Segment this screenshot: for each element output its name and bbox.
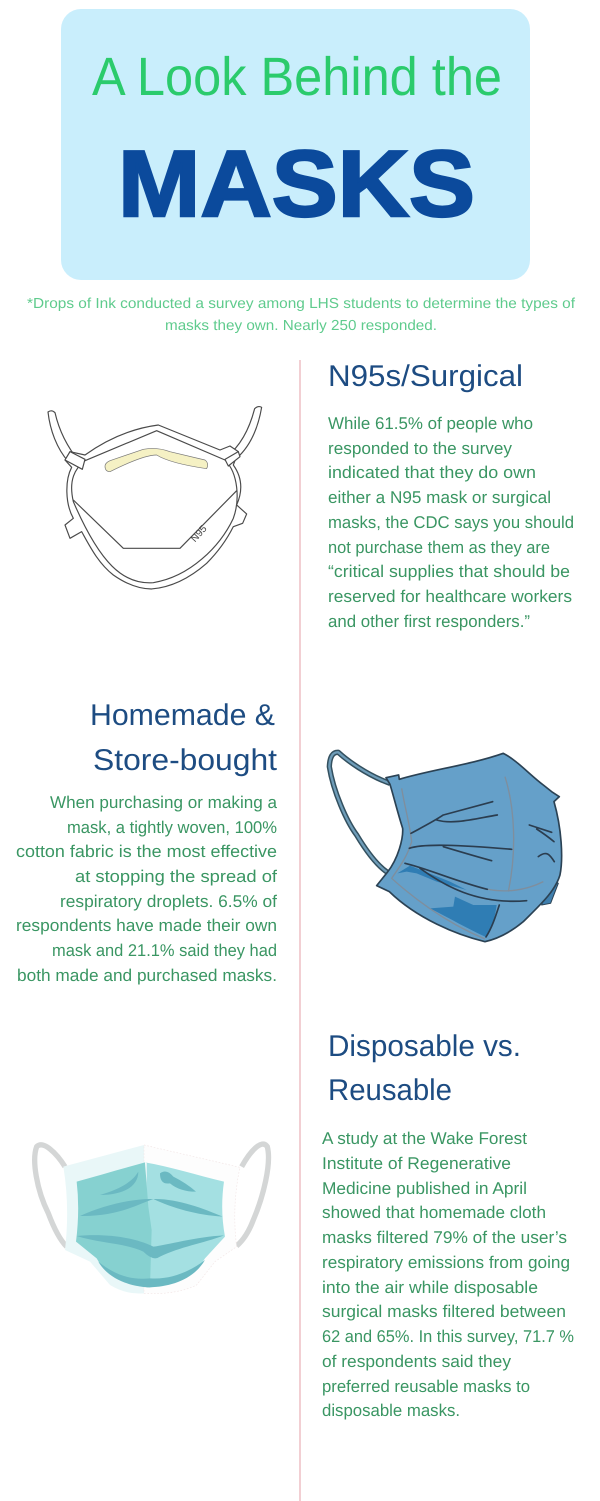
text: disposable paragraph: Institute of Regenerative [322,1154,511,1173]
text: N95 paragraph: and other first responders.” [328,612,530,631]
text: N95 paragraph: not purchase them as they are [328,538,550,557]
text: disposable paragraph: respiratory emissions from going [322,1253,570,1272]
survey note [27,296,576,334]
text: disposable paragraph: A study at the Wake Forest [322,1129,527,1148]
text: N95 paragraph: “critical supplies that should be [328,562,570,581]
heading: Homemade and Store-bought [90,699,278,777]
text: N95 paragraph: indicated that they do own [328,463,536,482]
title: MASKS [118,131,475,236]
survey note: *Drops of Ink conducted a survey among LHS students to determine the types of [27,296,576,312]
survey note: masks they own. Nearly 250 responded. [165,318,437,334]
icon: disposable surgical mask [35,1144,268,1294]
text: disposable paragraph: disposable masks. [322,1401,460,1420]
title [92,47,502,236]
text: homemade paragraph: respiratory droplets. 6.5% of [60,892,277,911]
text: disposable paragraph [322,1129,574,1420]
text: N95 paragraph: either a N95 mask or surgical [328,488,551,507]
text: N95 paragraph [328,414,574,631]
text: disposable paragraph: Medicine published in April [322,1179,527,1198]
heading: Disposable vs. Reusable [328,1030,521,1107]
text: homemade paragraph: mask, a tightly woven, 100% [67,818,277,837]
text: disposable paragraph: of respondents said they [322,1352,512,1371]
text: N95 paragraph: While 61.5% of people who [328,414,533,433]
text: homemade paragraph: mask and 21.1% said they had [52,941,277,960]
text: homemade paragraph: cotton fabric is the most effective [16,842,277,861]
text: homemade paragraph: respondents have made their own [16,916,277,935]
text: N95 paragraph: reserved for healthcare workers [328,587,572,606]
heading: Homemade and Store-bought: Homemade & [90,699,275,732]
header panel [61,9,530,280]
text: N95 paragraph: responded to the survey [328,439,512,458]
text: disposable paragraph: showed that homemade cloth [322,1203,546,1222]
text: homemade paragraph: When purchasing or making a [50,793,278,812]
heading: Homemade and Store-bought: Store-bought [93,744,278,777]
icon: blue cloth mask [329,752,562,942]
text: disposable paragraph: masks filtered 79% of the user’s [322,1228,567,1247]
text: disposable paragraph: preferred reusable masks to [322,1377,530,1396]
title: A Look Behind the [92,47,502,107]
heading: N95s/Surgical: N95s/Surgical [328,360,523,393]
text: disposable paragraph: 62 and 65%. In this survey, 71.7 % [322,1327,574,1346]
text: disposable paragraph: surgical masks filtered between [322,1302,566,1321]
text: disposable paragraph: into the air while disposable [322,1278,538,1297]
heading: Disposable vs. Reusable: Reusable [328,1074,452,1107]
icon: N95 mask [48,407,262,589]
text: homemade paragraph: at stopping the spread of [75,867,277,886]
heading: Disposable vs. Reusable: Disposable vs. [328,1030,521,1063]
text: homemade paragraph: both made and purchased masks. [17,966,277,985]
text: homemade paragraph [16,793,278,985]
text: N95 paragraph: masks, the CDC says you should [328,513,574,532]
icon: N95 mask: N95 [189,523,209,544]
